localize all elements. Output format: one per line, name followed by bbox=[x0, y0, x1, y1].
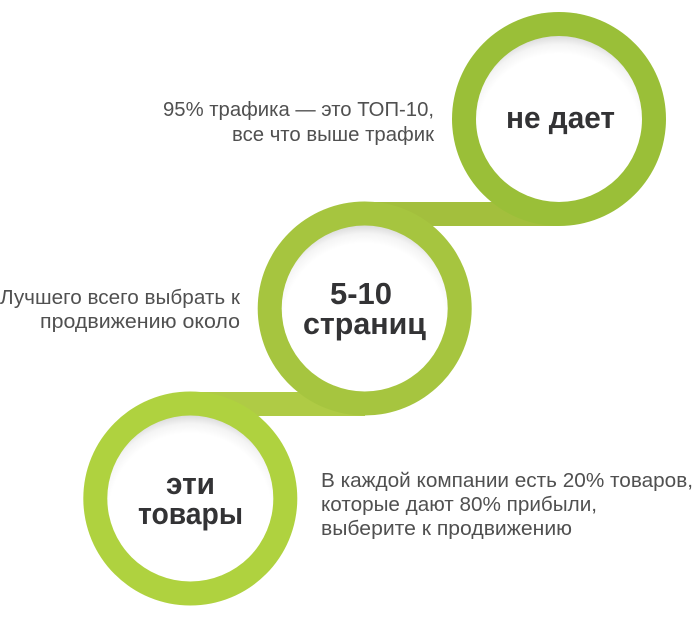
circle: 5-10 страниц: 5-10 bbox=[330, 276, 392, 311]
circle: не дает: не дает bbox=[506, 100, 615, 135]
text block: top caption: все что выше трафик bbox=[232, 124, 434, 146]
circle: эти товары bbox=[83, 392, 297, 606]
circle: 5-10 страниц bbox=[258, 202, 472, 416]
circle: 5-10 страниц: страниц bbox=[303, 306, 426, 341]
text block: bottom caption: выберите к продвижению bbox=[321, 518, 572, 540]
text block: top caption: 95% трафика — это ТОП-10, bbox=[163, 99, 434, 121]
text block: top caption bbox=[163, 99, 434, 146]
text block: bottom caption: В каждой компании есть 20% товаров, bbox=[321, 470, 693, 492]
connector: top to middle circle bbox=[365, 202, 559, 226]
text block: bottom caption: которые дают 80% прибыли, bbox=[321, 494, 597, 516]
circle: не дает bbox=[452, 12, 666, 226]
text block: middle caption: Лучшего всего выбрать к bbox=[0, 287, 240, 309]
connector: middle to bottom circle bbox=[190, 392, 365, 416]
text block: middle caption: продвижению около bbox=[40, 311, 240, 333]
text block: bottom caption bbox=[321, 470, 693, 540]
circle: эти товары: эти bbox=[166, 466, 215, 501]
text block: middle caption bbox=[0, 287, 240, 333]
circle: эти товары: товары bbox=[138, 496, 243, 531]
